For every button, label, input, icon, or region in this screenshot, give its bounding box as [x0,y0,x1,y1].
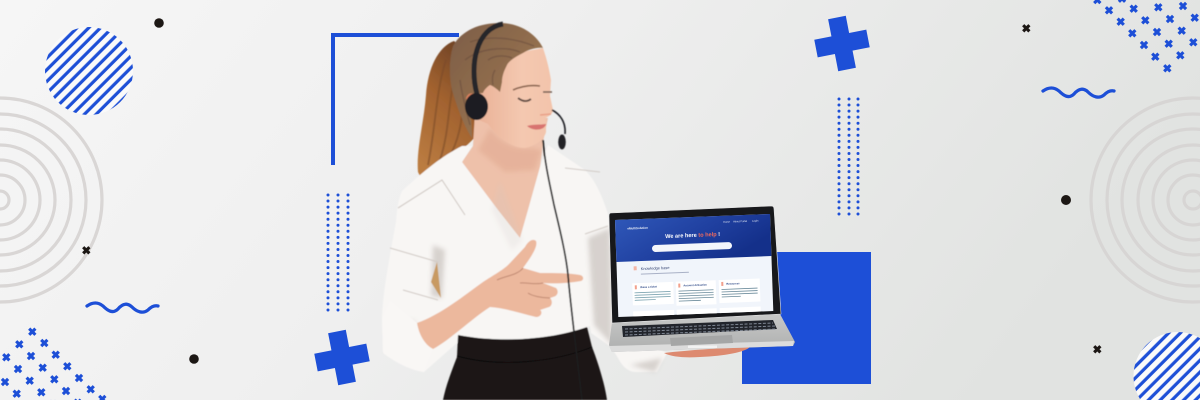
keyboard keys [625,323,776,335]
ear cup [465,93,488,120]
left concentric rings [0,98,102,302]
blue x pattern top right [1094,0,1198,71]
shirt cuff [382,300,433,372]
hair strand behind arm [431,262,441,298]
woman with headset [382,23,667,400]
blue x pattern bottom left [2,329,105,400]
neck shadow [478,128,542,172]
neck and chest [462,112,548,238]
hair top [450,23,543,138]
laptop [609,206,795,352]
navigation: Login [752,219,759,223]
right concentric rings [1091,98,1200,302]
card 1 [632,282,674,305]
skirt belt seam [457,347,592,362]
navigation: Home [723,221,731,224]
card 3 [719,278,760,303]
striped circle top left [45,27,133,115]
card 2 [676,280,716,306]
heading knowledge base: Knowledge base [641,265,670,271]
search bar [652,242,732,252]
collar and fold lines [383,168,608,353]
card 1: Raise a ticket [640,284,657,289]
black x marks [83,25,1100,352]
logo: eMultiSolution [627,226,648,231]
keyboard [622,320,777,337]
hand shading [497,268,550,298]
hair streaks [460,38,534,125]
ponytail streaks [428,60,464,165]
card 2: Account Activation [683,283,707,287]
laptop base [609,314,795,352]
blue wave right [1043,88,1114,97]
blue plus bottom [311,326,373,389]
forearm and pointing hand [417,240,583,349]
ear [466,93,477,108]
face [475,48,553,148]
blue corner bracket [333,35,459,165]
mic boom [552,110,565,134]
blue square [742,252,871,384]
front notch [688,346,717,348]
screen [615,214,773,317]
subheading [641,272,689,274]
black dots [154,18,1071,364]
striped circle bottom right [1134,332,1200,400]
blue plus top [811,12,873,75]
shirt shading [388,180,662,372]
lower cards [633,306,761,316]
navigation: About Portal [733,220,747,223]
lid [609,206,781,323]
blue wave left [87,303,158,312]
supporting hand under laptop [664,347,750,357]
dotted columns right [839,99,858,215]
ponytail [418,41,476,178]
face details [513,86,552,130]
screen page [615,214,773,317]
card 3: Resources [726,281,740,286]
dotted columns left [328,195,348,311]
mic tip [558,134,566,150]
trackpad [670,335,733,346]
icon [634,266,637,270]
skirt [443,327,607,400]
shirt body [382,145,667,372]
headset [465,24,582,400]
headband [474,24,503,94]
base front edge [609,341,794,352]
hero title: We are here to help ! [665,232,720,240]
cable [543,140,582,400]
hero panel [615,214,771,262]
